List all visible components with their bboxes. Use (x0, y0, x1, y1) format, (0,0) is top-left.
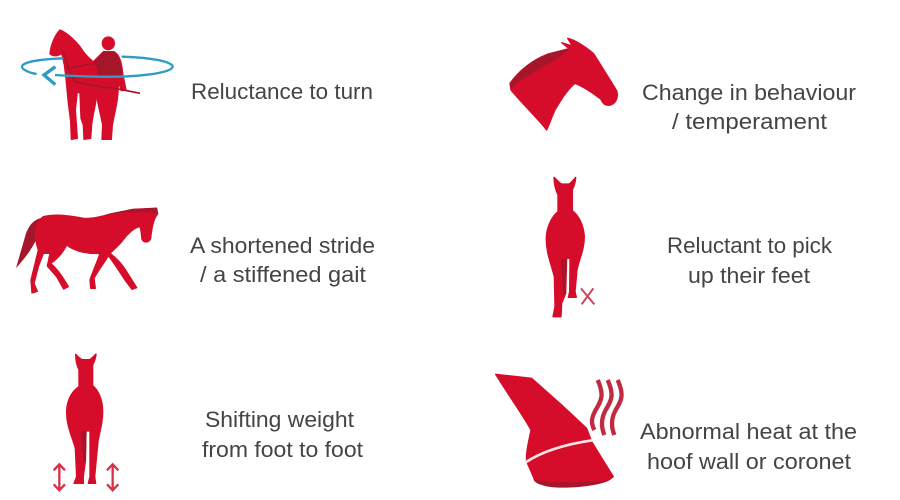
handler silhouette (93, 37, 126, 139)
mane shade (510, 49, 569, 90)
text: shifting weight (202, 407, 363, 462)
icon: horse head (510, 38, 617, 130)
icon: hoof with heat waves (496, 374, 622, 488)
tail (16, 217, 45, 268)
text: change in behaviour: / temperament (672, 109, 827, 134)
text: shifting weight: Shifting weight (205, 407, 354, 432)
icon: horse from behind with arrows (54, 354, 118, 490)
cross mark (581, 288, 594, 304)
lead rope and whip (63, 52, 140, 93)
chevron arrow (44, 67, 55, 85)
text: change in behaviour (642, 80, 856, 134)
handler torso shade (94, 52, 122, 75)
blue turning ring (22, 57, 173, 77)
icon: walking horse (16, 208, 158, 293)
text: reluctant to pick: Reluctant to pick (667, 233, 833, 258)
text: reluctance to turn: Reluctance to turn (191, 79, 373, 104)
text: shortened stride (190, 233, 375, 287)
left arrow (54, 464, 65, 490)
mane shade (103, 208, 158, 215)
text: abnormal heat (640, 419, 857, 474)
text: reluctant to pick (667, 233, 833, 288)
text: shifting weight: from foot to foot (202, 437, 363, 462)
text: shortened stride: / a stiffened gait (200, 262, 366, 287)
text: reluctant to pick: up their feet (688, 263, 810, 288)
horse silhouette (50, 30, 97, 139)
coronet band (526, 440, 592, 462)
text: abnormal heat: Abnormal heat at the (640, 419, 857, 444)
icon: horse and handler turning (22, 30, 173, 139)
horse rear silhouette (546, 177, 584, 317)
heat waves (592, 380, 622, 435)
right arrow (107, 464, 118, 490)
icon: horse from behind lifting foot (546, 177, 594, 317)
tail (81, 430, 87, 462)
text: shortened stride: A shortened stride (190, 233, 375, 258)
text: change in behaviour: Change in behaviour (642, 80, 856, 105)
text: abnormal heat: hoof wall or coronet (647, 449, 851, 474)
horse rear silhouette (67, 354, 103, 483)
horse body (31, 208, 158, 293)
tail (561, 258, 567, 294)
hoof sole shade (533, 478, 612, 488)
hoof and leg (496, 374, 613, 482)
head and neck (510, 38, 617, 130)
